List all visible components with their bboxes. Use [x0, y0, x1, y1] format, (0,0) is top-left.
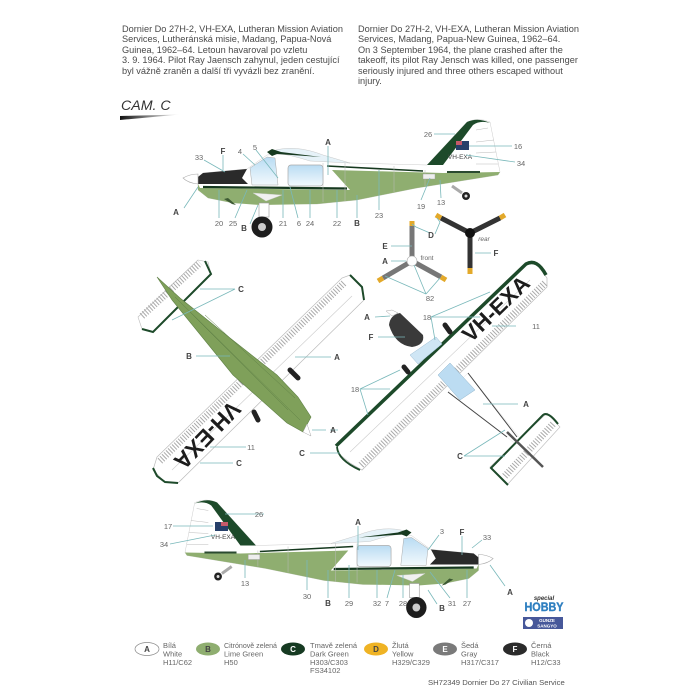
heading: CAM. C: CAM. C [121, 98, 171, 114]
engines underside [254, 370, 298, 420]
labels: upper side view: 25 [229, 219, 237, 228]
wing top [337, 262, 547, 470]
text block: Czech description: Services, Lutheránská misie, Madang, Papua-Nová [122, 34, 331, 44]
legend: F black: Black [531, 650, 550, 658]
labels: underside plan view [186, 285, 340, 468]
legend: E gray: Gray [461, 650, 478, 658]
legend: D yellow: D [373, 645, 379, 654]
flag and registration: upper side view [448, 141, 473, 161]
labels: upper side view: 5 [253, 143, 257, 152]
labels: upper side view: 4 [238, 147, 242, 156]
labels: upper side view: 13 [437, 198, 445, 207]
labels: lower side view: 29 [345, 599, 353, 608]
legend: A white [135, 641, 192, 667]
fuselage underside [157, 277, 311, 432]
legend: C dark green: Dark Green [310, 650, 349, 658]
labels: upper side view: A [173, 208, 179, 217]
labels: upper side view: A [325, 138, 331, 147]
labels: upper side view: 6 [297, 219, 301, 228]
labels: lower side view: 31 [448, 599, 456, 608]
engines top [404, 325, 450, 372]
labels: top plan view: A [523, 400, 529, 409]
labels: upper side view: 24 [306, 219, 314, 228]
text block: Czech description: 3. 9. 1964. Pilot Ray Jaensch zahynul, jeden cestující [122, 55, 340, 65]
legend: E gray: Šedá [461, 641, 479, 650]
labels: top plan view: F [369, 333, 374, 342]
labels: lower side view: 7 [385, 599, 389, 608]
logo: Gunze Sangyo [523, 617, 563, 629]
tailplane top [490, 413, 560, 485]
labels: lower side view: 34 [160, 540, 168, 549]
leader lines [170, 134, 518, 604]
labels: top plan view: A [364, 313, 370, 322]
labels: upper side view: B [354, 219, 360, 228]
logo: Special Hobby: special [534, 596, 554, 602]
labels: top plan view: 18 [423, 313, 431, 322]
aircraft: top plan view [336, 262, 560, 485]
propeller: rear [436, 215, 505, 274]
wing underside [153, 275, 364, 483]
labels: underside plan view: C [236, 459, 242, 468]
registration underside: VH-EXA [169, 396, 246, 475]
text block: Czech description: Guinea, 1962–64. Letoun havaroval po vzletu [122, 45, 307, 55]
labels: propellers: A [382, 257, 388, 266]
aircraft: lower side view [185, 500, 493, 618]
legend: D yellow: Yellow [392, 650, 414, 658]
labels: underside plan view: C [299, 449, 305, 458]
labels: upper side view: 33 [195, 153, 203, 162]
labels: underside plan view: A [330, 426, 336, 435]
text block: Czech description [122, 24, 343, 76]
labels: propellers: F [494, 249, 499, 258]
labels: lower side view: 13 [241, 579, 249, 588]
flag and registration: upper side view: VH-EXA [448, 154, 473, 161]
legend: C dark green: Tmavě zelená [310, 641, 358, 650]
labels: propellers: D [428, 231, 434, 240]
text block: English description: Dornier Do 27H-2, VH-EXA, Lutheran Mission Aviation [358, 24, 579, 34]
legend: E gray [433, 641, 499, 667]
text block: English description [358, 24, 579, 86]
legend: B lime green: B [205, 645, 211, 654]
legend: A white: White [163, 650, 182, 658]
labels: lower side view: 17 [164, 522, 172, 531]
labels: upper side view: 19 [417, 202, 425, 211]
logo: Gunze Sangyo: GUNZE [539, 618, 555, 623]
legend: B lime green [196, 641, 278, 667]
labels: lower side view [160, 510, 513, 613]
legend: F black: H12/C33 [531, 658, 561, 667]
text block: English description: seriously injured and three others escaped without [358, 66, 563, 76]
text block: English description: takeoff, its pilot Ray Jensch was killed, one passenger [358, 55, 578, 65]
text block: English description: On 3 September 1964, the plane crashed after the [358, 45, 563, 55]
legend: E gray: H317/C317 [461, 658, 499, 667]
legend: D yellow [364, 641, 430, 667]
labels: lower side view: A [355, 518, 361, 527]
labels: propellers [382, 231, 499, 303]
legend: C dark green: H303/C303 [310, 658, 348, 667]
legend: F black: Černá [531, 641, 552, 650]
legend: C dark green: C [290, 645, 296, 654]
aircraft: underside plan view [138, 260, 364, 483]
labels: top plan view [351, 313, 540, 461]
labels: propellers: 82 [426, 294, 434, 303]
registration top: VH-EXA [457, 271, 535, 347]
legend: C dark green: FS34102 [310, 666, 340, 675]
text block: Czech description: byl vážně zraněn a další tři vyvázli bez zranění. [122, 66, 315, 76]
labels: lower side view: 33 [483, 533, 491, 542]
legend: B lime green: Lime Green [224, 650, 263, 658]
labels: upper side view: 34 [517, 159, 525, 168]
aircraft: upper side view [183, 120, 500, 238]
labels: top plan view: 18 [351, 385, 359, 394]
labels: lower side view: A [507, 588, 513, 597]
labels: upper side view: B [241, 224, 247, 233]
cowling and cabin [389, 313, 423, 347]
tailplane underside [138, 260, 211, 332]
labels: underside plan view: C [238, 285, 244, 294]
labels: lower side view: 32 [373, 599, 381, 608]
legend: E gray: E [442, 645, 448, 654]
legend: F black [503, 641, 561, 667]
text block: Czech description: Dornier Do 27H-2, VH-EXA, Lutheran Mission Aviation [122, 24, 343, 34]
labels: lower side view: B [325, 599, 331, 608]
product caption: SH72349 Dornier Do 27 Civilian Service [428, 678, 565, 687]
labels: upper side view: 16 [514, 142, 522, 151]
legend: A white: H11/C62 [163, 658, 192, 667]
logo: Special Hobby: HOBBY [524, 600, 564, 614]
labels: upper side view: 21 [279, 219, 287, 228]
labels: underside plan view: A [334, 353, 340, 362]
labels: propellers: rear [478, 236, 491, 243]
labels: lower side view: 3 [440, 527, 444, 536]
flag and registration: lower side view [211, 522, 236, 541]
legend: A white: Bílá [163, 641, 177, 650]
flag and registration: lower side view: VH-EXA [211, 534, 236, 541]
labels: propellers: E [382, 242, 388, 251]
labels: lower side view: 30 [303, 592, 311, 601]
legend: B lime green: Citrónově zelená [224, 641, 278, 650]
labels: underside plan view: 11 [247, 443, 255, 452]
legend: A white: A [144, 645, 150, 654]
labels: lower side view: 27 [463, 599, 471, 608]
text block: English description: Services, Madang, Papua-New Guinea, 1962–64. [358, 34, 560, 44]
legend: B lime green: H50 [224, 658, 238, 667]
legend: D yellow: Žlutá [392, 641, 410, 650]
logo: Gunze Sangyo: SANGYO [537, 624, 557, 628]
labels: top plan view: 11 [532, 322, 540, 331]
labels: propellers: front [420, 255, 434, 262]
labels: underside plan view: B [186, 352, 192, 361]
legend: D yellow: H329/C329 [392, 658, 430, 667]
labels: upper side view: 26 [424, 130, 432, 139]
labels: lower side view: 26 [255, 510, 263, 519]
labels: lower side view: B [439, 604, 445, 613]
labels: upper side view: F [221, 147, 226, 156]
labels: lower side view: F [460, 528, 465, 537]
labels: upper side view: 22 [333, 219, 341, 228]
labels: upper side view: 20 [215, 219, 223, 228]
propeller: front [378, 221, 446, 281]
text block: English description: injury. [358, 76, 382, 86]
rear fuselage top [448, 373, 543, 467]
labels: upper side view: 23 [375, 211, 383, 220]
labels: top plan view: C [457, 452, 463, 461]
heading: CAM. C [120, 98, 180, 120]
legend: F black: F [513, 645, 518, 654]
legend: C dark green [281, 641, 358, 675]
labels: upper side view [173, 130, 525, 233]
labels: lower side view: 28 [399, 599, 407, 608]
